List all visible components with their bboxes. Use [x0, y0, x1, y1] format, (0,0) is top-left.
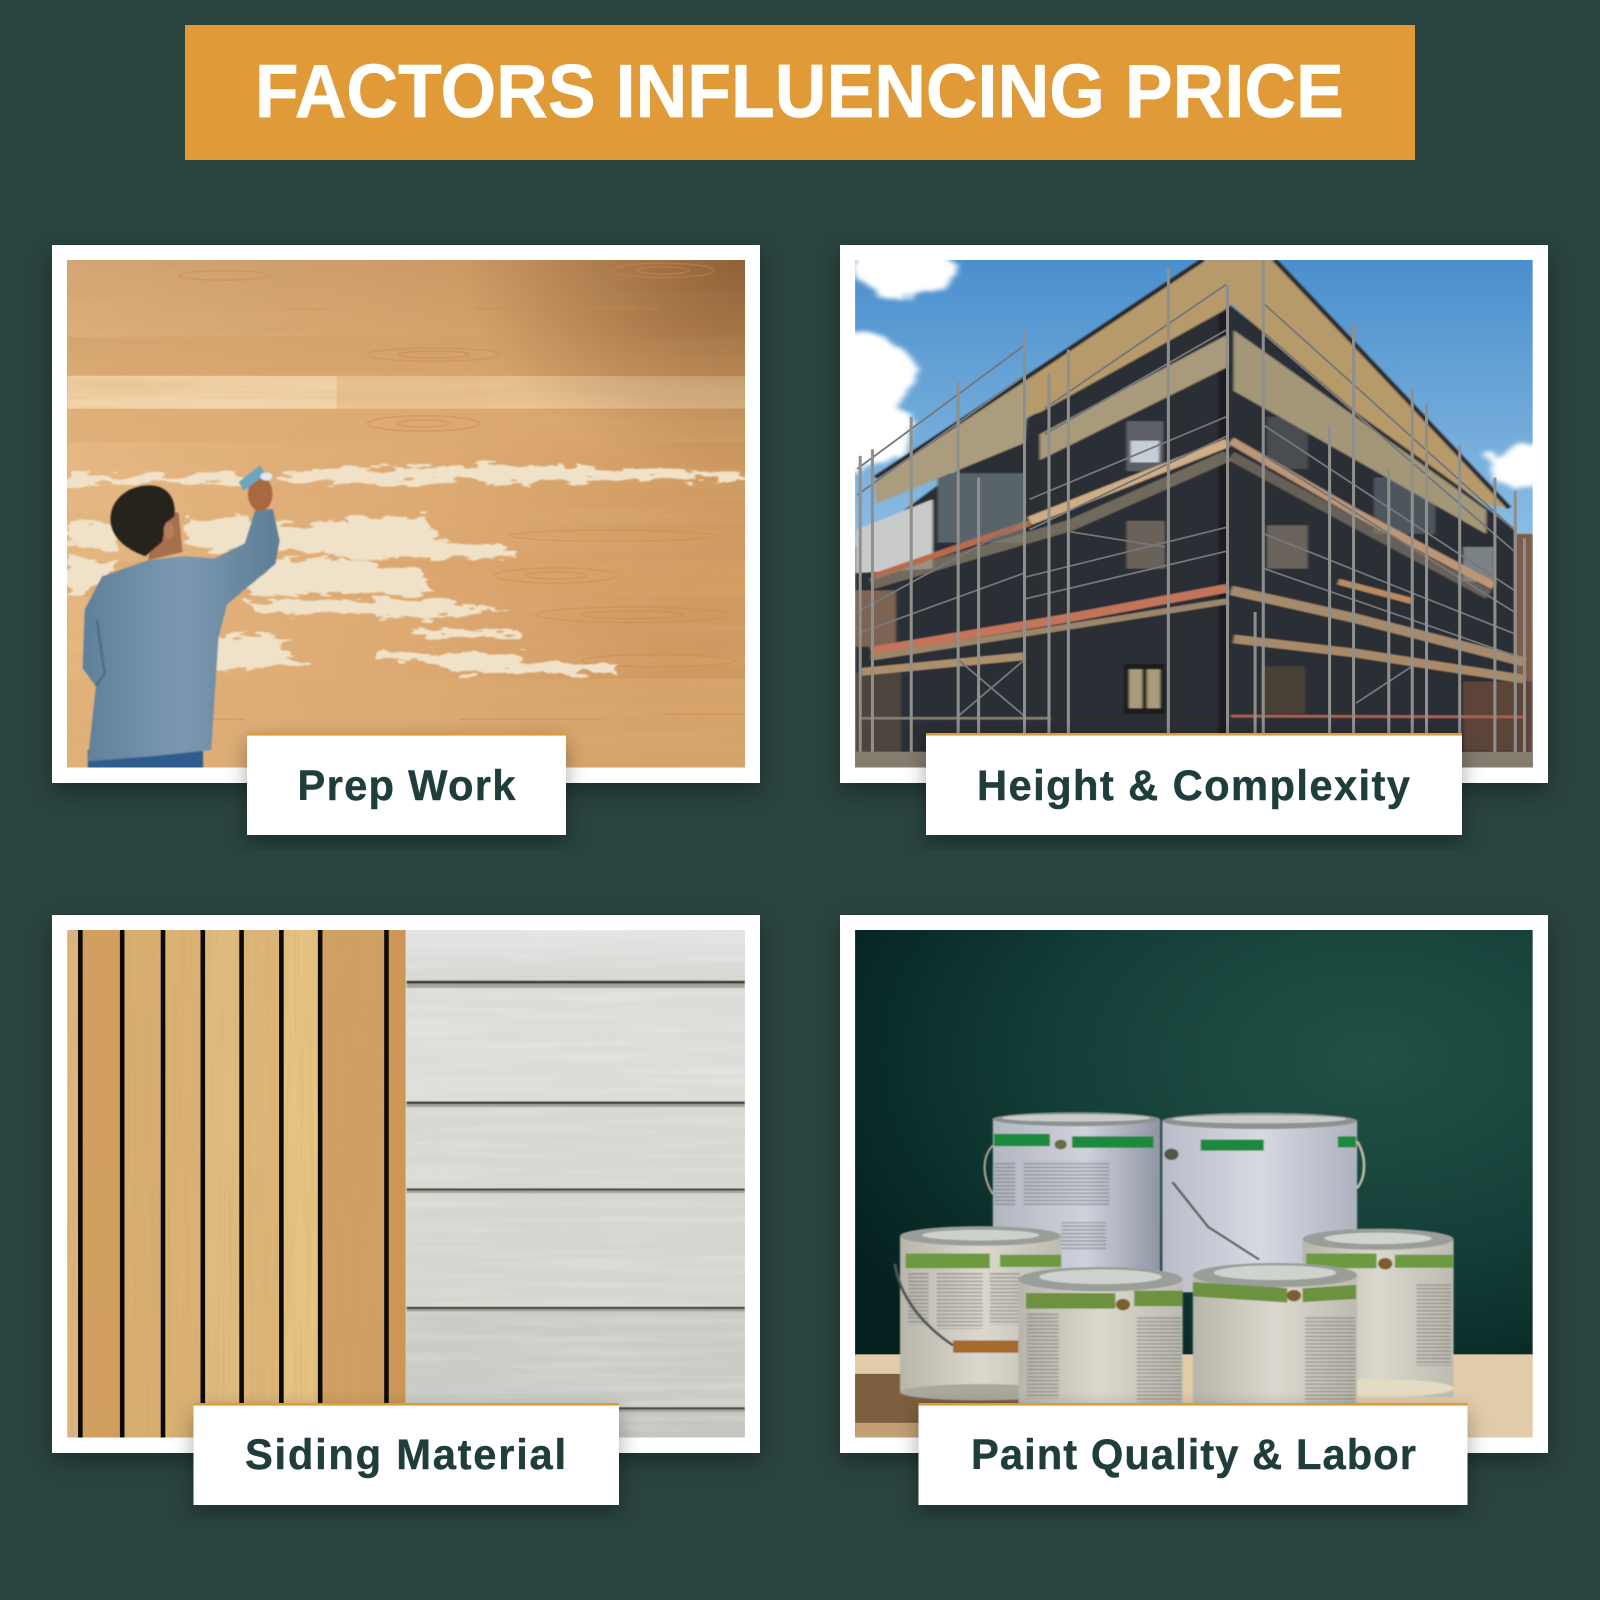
photo: worker scraping wood siding [67, 260, 753, 770]
label: prep work: Prep Work [298, 761, 516, 809]
panel: paint quality and labor [840, 915, 1548, 1505]
left small can [895, 1226, 1061, 1400]
title banner [185, 25, 1415, 160]
hand [248, 477, 272, 511]
scraped paint patches [67, 464, 753, 673]
clouds [855, 260, 1533, 492]
sweater [83, 509, 280, 761]
wooden table [855, 1354, 1533, 1438]
neck and face [148, 510, 183, 560]
roof soffit [1026, 260, 1507, 508]
photo: scaffolded building [855, 260, 1533, 768]
scraper [239, 465, 265, 491]
label: paint quality and labor [918, 1403, 1468, 1505]
front middle left can [1017, 1266, 1184, 1403]
label: siding material: Siding Material [245, 1430, 566, 1478]
label: height and complexity: Height & Complexity [977, 761, 1410, 809]
hair [110, 485, 175, 556]
title text: FACTORS INFLUENCING PRICE [255, 50, 1344, 133]
photo: paint cans [855, 930, 1533, 1442]
wood knots and cathedral grain [178, 262, 744, 720]
vertical wood boards [67, 930, 406, 1438]
right small can [1303, 1229, 1454, 1397]
building walls [855, 304, 1533, 768]
panel: height and complexity [805, 245, 1550, 835]
black board gaps [78, 930, 389, 1438]
jeans [88, 750, 203, 770]
label: prep work [247, 733, 566, 835]
reflective windows [855, 417, 1533, 759]
panel: prep work [52, 245, 760, 835]
back left can [985, 1112, 1160, 1290]
front middle right can [1192, 1262, 1358, 1403]
ground [855, 752, 1533, 768]
panel: siding material [52, 915, 760, 1505]
siding shadow lines [407, 981, 745, 1412]
man from behind [83, 465, 280, 770]
grey lap siding [406, 980, 745, 1412]
label: siding material [194, 1403, 619, 1505]
scaffold rails [857, 285, 1514, 716]
photo: wood and fiber cement siding [67, 930, 746, 1438]
label: paint quality and labor: Paint Quality & Labor [971, 1430, 1416, 1478]
scaffold poles [860, 260, 1524, 764]
scaffold platforms [861, 441, 1524, 718]
back right can [1162, 1113, 1364, 1292]
dark green wall [855, 930, 1533, 1356]
label: height and complexity [926, 733, 1462, 835]
roof fascia [876, 260, 1203, 478]
